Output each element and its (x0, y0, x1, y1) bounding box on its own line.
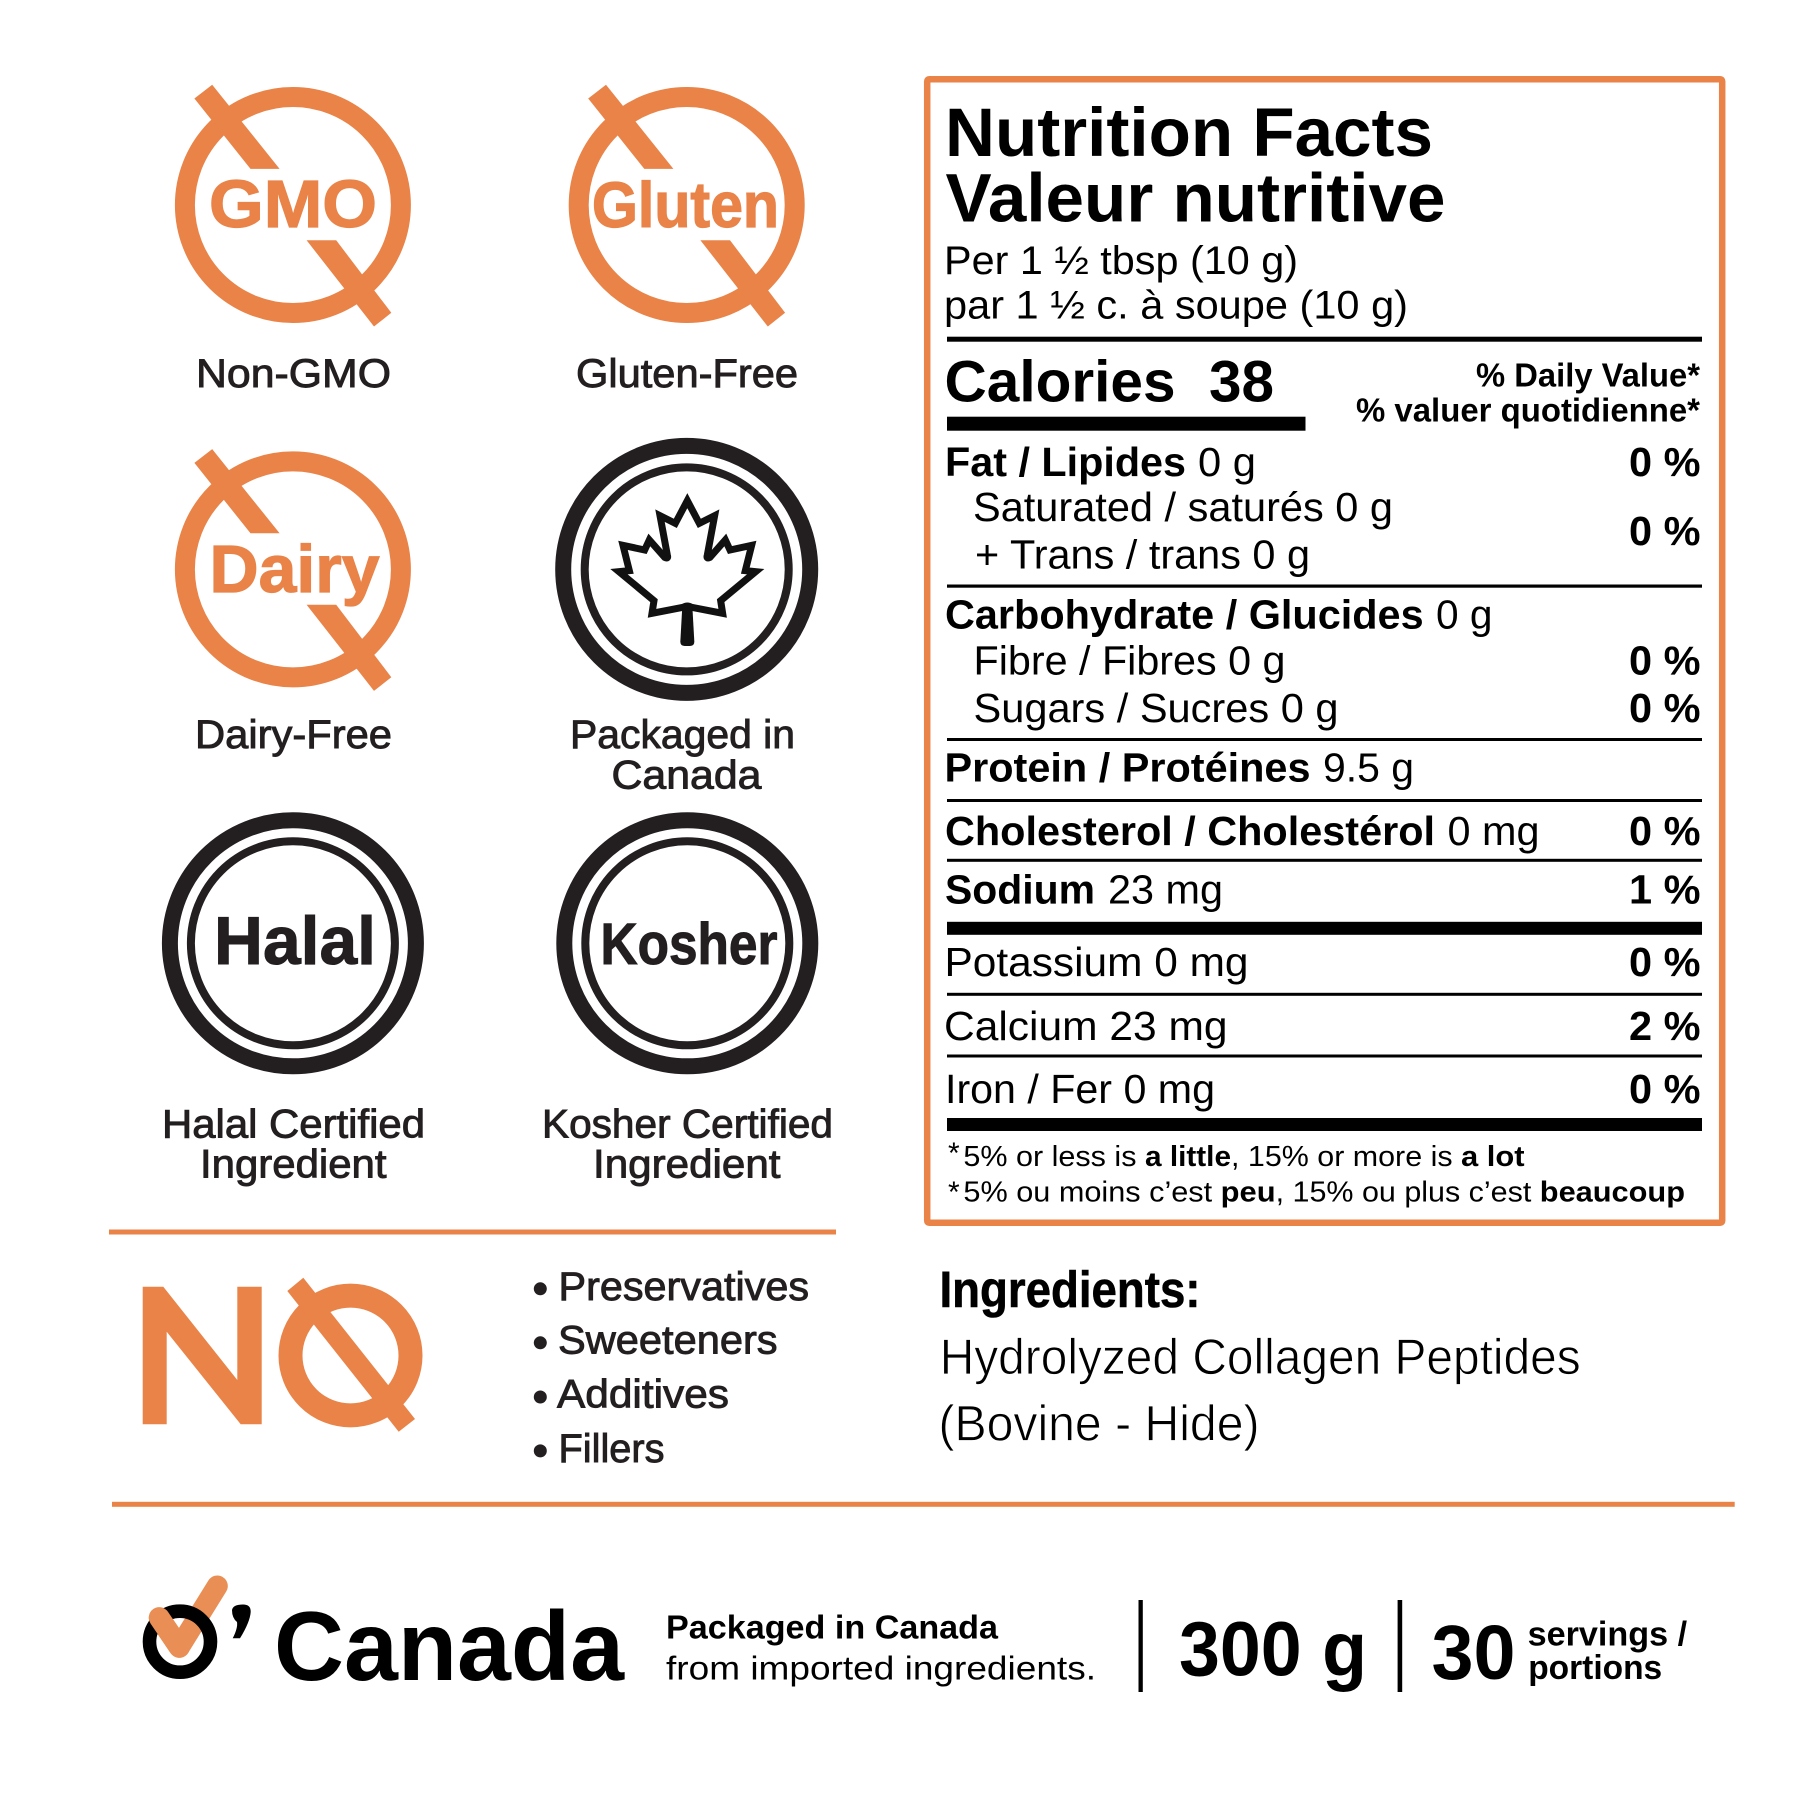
row: sodium: 1 % (1629, 866, 1700, 912)
badge: kosher (542, 820, 833, 1187)
row: cholesterol: 0 mg (1448, 808, 1540, 854)
icon: halal seal (170, 820, 416, 1066)
row: fibre (974, 637, 1700, 683)
servings count: portions (1528, 1649, 1662, 1687)
servings count: 30 (1432, 1610, 1516, 1696)
row: sugars (974, 685, 1700, 731)
list: no preservatives, sweeteners, additives, fillers: Sweeteners (558, 1319, 778, 1363)
row: cholesterol: 0 % (1629, 808, 1700, 854)
heading: nutrition facts: Nutrition Facts (945, 94, 1433, 171)
footnote (948, 1137, 1685, 1209)
row: iron (945, 1066, 1700, 1112)
icon: dairy prohibited (185, 449, 401, 691)
footnote: , 15% ou plus c’est (1276, 1177, 1540, 1209)
row: protein: 9.5 g (1323, 744, 1414, 790)
row: sugars: 0 % (1629, 685, 1700, 731)
row: fat: 0 g (1198, 439, 1256, 485)
row: potassium: 0 % (1629, 939, 1700, 985)
origin statement: from imported ingredients. (666, 1650, 1096, 1686)
row: calcium: Calcium 23 mg (944, 1003, 1228, 1049)
row: protein: Protein / Protéines (944, 744, 1310, 790)
origin statement: Packaged in Canada (666, 1609, 999, 1646)
icon: maple leaf seal (563, 446, 810, 693)
footnote: beaucoup (1540, 1177, 1685, 1209)
servings count (1432, 1610, 1688, 1696)
label: Packaged in Canada: Canada (612, 753, 762, 797)
label: Halal Certified Ingredient: Halal Certified (162, 1102, 425, 1146)
heading: nutrition facts (945, 94, 1446, 237)
daily value heading: % Daily Value* (1476, 357, 1700, 394)
row: saturated and trans: 0 % (1629, 508, 1700, 554)
icon: NO wordmark (143, 1278, 415, 1432)
label: Non-GMO: Non-GMO (196, 352, 391, 396)
daily value heading (1356, 357, 1700, 428)
row: iron: 0 % (1629, 1066, 1700, 1112)
serving size (944, 239, 1408, 327)
label: Kosher Certified Ingredient: Kosher Certified (542, 1102, 833, 1146)
row: saturated and trans: Saturated / saturés 0 g (973, 484, 1393, 530)
icon: GMO prohibited: GMO (209, 167, 377, 242)
icon: gluten prohibited: Gluten (592, 169, 779, 241)
row: potassium: Potassium 0 mg (944, 939, 1248, 985)
origin statement (666, 1609, 1096, 1686)
footnote: 5% or less is (963, 1141, 1145, 1173)
list: no preservatives, sweeteners, additives, fillers: Additives (557, 1373, 729, 1417)
row: saturated and trans (973, 484, 1700, 577)
footnote: * (948, 1137, 960, 1170)
badge: non-GMO (185, 85, 401, 396)
footnote: 5% ou moins c’est (963, 1177, 1221, 1209)
row: carbohydrate: Carbohydrate / Glucides (945, 591, 1424, 637)
icon: halal seal: Halal (214, 903, 376, 979)
list: no preservatives, sweeteners, additives, fillers (534, 1265, 809, 1471)
row: cholesterol (945, 808, 1700, 854)
logo: O' Canada: Canada (274, 1591, 625, 1701)
row: cholesterol: Cholesterol / Cholestérol (945, 808, 1435, 854)
row: fat (945, 439, 1700, 485)
row: potassium (944, 939, 1700, 985)
list: no preservatives, sweeteners, additives, fillers: Preservatives (558, 1265, 809, 1309)
badge: dairy-free (185, 449, 401, 757)
footnote: , 15% or more is (1231, 1141, 1461, 1173)
label: Dairy-Free: Dairy-Free (195, 713, 392, 757)
badge: gluten-free (576, 85, 798, 396)
label: Halal Certified Ingredient (162, 1102, 425, 1187)
icon: gluten prohibited (579, 85, 795, 326)
servings count: servings / (1528, 1616, 1688, 1654)
badge: packaged in Canada (563, 446, 810, 797)
footnote: a lot (1461, 1141, 1525, 1173)
serving size: Per 1 ½ tbsp (10 g) (944, 239, 1298, 283)
row: saturated and trans: + Trans / trans 0 g (975, 531, 1310, 577)
label: Packaged in Canada (570, 713, 795, 797)
ingredients (938, 1261, 1581, 1452)
ingredients: (Bovine - Hide) (938, 1396, 1260, 1452)
list: no preservatives, sweeteners, additives, fillers: Fillers (558, 1427, 664, 1471)
row: sodium (945, 866, 1700, 912)
label: Kosher Certified Ingredient: Ingredient (593, 1143, 780, 1187)
calories: 38 (1209, 350, 1274, 415)
icon: GMO prohibited (185, 85, 401, 326)
row: calcium (944, 1003, 1700, 1049)
footnote: * (948, 1176, 960, 1209)
calories (944, 350, 1306, 431)
calories: Calories (944, 350, 1176, 415)
row: fibre: Fibre / Fibres 0 g (974, 637, 1286, 683)
label: Gluten-Free: Gluten-Free (576, 352, 798, 396)
row: sodium: 23 mg (1108, 866, 1223, 912)
row: fat: 0 % (1629, 439, 1700, 485)
panel: dietary badges (162, 85, 833, 1187)
row: fibre: 0 % (1629, 637, 1700, 683)
icon: kosher seal (564, 820, 810, 1066)
row: calcium: 2 % (1629, 1003, 1700, 1049)
net weight: 300 g (1179, 1606, 1367, 1692)
row: carbohydrate: 0 g (1436, 591, 1492, 637)
serving size: par 1 ½ c. à soupe (10 g) (944, 283, 1408, 327)
row: iron: Iron / Fer 0 mg (945, 1066, 1215, 1112)
row: sugars: Sugars / Sucres 0 g (974, 685, 1338, 731)
row: sodium: Sodium (945, 866, 1095, 912)
row: fat: Fat / Lipides (945, 439, 1186, 485)
heading: nutrition facts: Valeur nutritive (946, 160, 1446, 237)
icon: kosher seal: Kosher (600, 912, 778, 977)
label: Kosher Certified Ingredient (542, 1102, 833, 1187)
panel: nutrition facts (927, 79, 1722, 1223)
footnote: peu (1221, 1177, 1276, 1209)
icon: dairy prohibited: Dairy (210, 532, 380, 607)
ingredients: Hydrolyzed Collagen Peptides (940, 1329, 1581, 1385)
daily value heading: % valuer quotidienne* (1356, 392, 1700, 428)
label: Packaged in Canada: Packaged in (570, 713, 795, 757)
footnote: a little (1145, 1141, 1231, 1173)
label: Halal Certified Ingredient: Ingredient (200, 1143, 386, 1187)
badge: halal (162, 820, 425, 1187)
ingredients: Ingredients: (940, 1261, 1200, 1318)
